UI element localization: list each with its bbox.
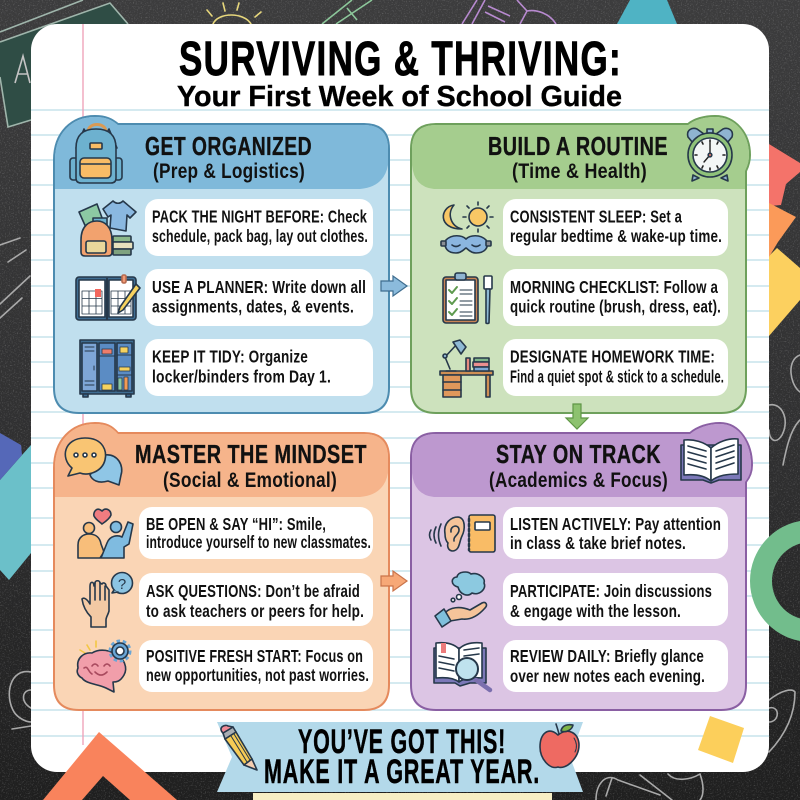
icon: checklist and toothbrush — [443, 273, 492, 324]
row: ask questions: ASK QUESTIONS: Don’t be afraid — [146, 581, 360, 601]
row: designate homework time: DESIGNATE HOMEWORK TIME: — [510, 346, 715, 366]
icon: pencil — [221, 725, 257, 770]
panel: stay on track — [411, 423, 752, 710]
teal triangle — [617, 0, 677, 24]
row: morning checklist: MORNING CHECKLIST: Follow a — [510, 277, 718, 297]
row: pack the night before: schedule, pack bag, lay out clothes. — [152, 226, 368, 246]
row: use a planner: assignments, dates, & events. — [152, 296, 354, 316]
icon: thought cloud over hand — [435, 572, 486, 627]
subheading: academics and focus: (Academics & Focus) — [489, 469, 668, 492]
subheading: prep and logistics: (Prep & Logistics) — [153, 160, 305, 183]
subtitle: Your First Week of School Guide — [177, 81, 622, 113]
row: participate: & engage with the lesson. — [510, 601, 681, 621]
icon: desk with lamp and books — [440, 340, 493, 397]
icon: alarm clock — [688, 128, 732, 181]
row: positive fresh start: POSITIVE FRESH START: Focus on — [146, 646, 363, 666]
icon: ear and notebook — [430, 515, 495, 552]
icon: apple — [540, 724, 579, 767]
row: be open and say hi: BE OPEN & SAY “HI”: Smile, — [146, 514, 326, 534]
row: listen actively: in class & take brief notes. — [510, 533, 686, 553]
row: participate: PARTICIPATE: Join discussions — [510, 581, 712, 601]
icon: moon, sun and sleep mask — [441, 202, 493, 253]
row: keep it tidy: locker/binders from Day 1. — [152, 366, 331, 386]
icon: planner and pencil — [76, 275, 140, 320]
heading: build a routine: BUILD A ROUTINE — [488, 131, 668, 161]
row: consistent sleep: CONSISTENT SLEEP: Set a — [510, 206, 682, 226]
heading: master the mindset: MASTER THE MINDSET — [135, 439, 367, 469]
chalk doodle: light bulb — [207, 3, 261, 24]
heading: get organized: GET ORGANIZED — [145, 131, 312, 161]
arrow: organized to routine — [381, 276, 407, 296]
icon: open book — [681, 439, 741, 483]
row: keep it tidy — [145, 339, 373, 396]
green ring — [761, 531, 800, 631]
orange chevron — [43, 732, 177, 800]
row: positive fresh start — [139, 640, 373, 692]
icon: book and magnifying glass — [434, 643, 490, 690]
chalk doodle: green pencil — [322, 0, 372, 24]
row: review daily: REVIEW DAILY: Briefly glance — [510, 646, 704, 666]
row: review daily: over new notes each evening. — [510, 666, 705, 686]
panel: get organized — [54, 116, 389, 413]
subheading: time and health: (Time & Health) — [512, 160, 647, 183]
row: ask questions — [139, 573, 373, 626]
chalk doodle: green board — [0, 0, 128, 127]
row: ask questions: to ask teachers or peers for help. — [146, 601, 364, 621]
arrow: mindset to stay on track — [381, 571, 407, 591]
row: designate homework time — [503, 339, 728, 396]
chalk doodle: purple book — [462, 0, 556, 24]
row: positive fresh start: new opportunities, not past worries. — [146, 665, 369, 685]
icon: backpack — [70, 124, 122, 183]
row: listen actively — [503, 507, 728, 559]
icon: packed bag and shirt — [79, 201, 136, 256]
row: keep it tidy: KEEP IT TIDY: Organize — [152, 346, 308, 366]
row: consistent sleep — [503, 199, 728, 256]
icon: chat bubbles — [65, 438, 122, 485]
row: morning checklist: quick routine (brush, dress, eat). — [510, 296, 721, 316]
row: pack the night before — [145, 199, 373, 256]
banner: closing message — [217, 722, 583, 800]
row: consistent sleep: regular bedtime & wake-up time. — [510, 226, 722, 246]
row: be open and say hi — [139, 507, 373, 559]
icon label: question mark: ? — [118, 576, 126, 593]
arrow: routine to stay on track — [566, 404, 588, 429]
row: review daily — [503, 640, 728, 692]
row: listen actively: LISTEN ACTIVELY: Pay attention — [510, 514, 721, 534]
chalk doodles: side and bottom — [0, 238, 800, 800]
row: use a planner — [145, 269, 373, 326]
icon: two people and heart — [78, 509, 133, 558]
banner text line 1: YOU’VE GOT THIS! — [298, 723, 506, 761]
row: use a planner: USE A PLANNER: Write down all — [152, 277, 366, 297]
coral, orange and yellow shapes — [769, 144, 800, 336]
icon: raised hand with question — [82, 572, 132, 627]
panel: master the mindset — [54, 423, 389, 710]
banner text line 2: MAKE IT A GREAT YEAR. — [264, 753, 540, 791]
icon: locker — [80, 340, 134, 397]
heading: stay on track: STAY ON TRACK — [496, 439, 661, 469]
row: be open and say hi: introduce yourself to new classmates. — [146, 532, 371, 552]
row: pack the night before: PACK THE NIGHT BEFORE: Check — [152, 206, 367, 226]
row: morning checklist — [503, 269, 728, 326]
panel: build a routine — [411, 116, 750, 413]
title: SURVIVING & THRIVING: — [179, 33, 622, 86]
icon: happy brain with gear — [77, 641, 130, 692]
subheading: social and emotional: (Social & Emotional) — [163, 469, 337, 492]
yellow sticky note — [698, 716, 744, 763]
blue and teal shapes — [0, 433, 31, 580]
row: participate — [503, 573, 728, 626]
